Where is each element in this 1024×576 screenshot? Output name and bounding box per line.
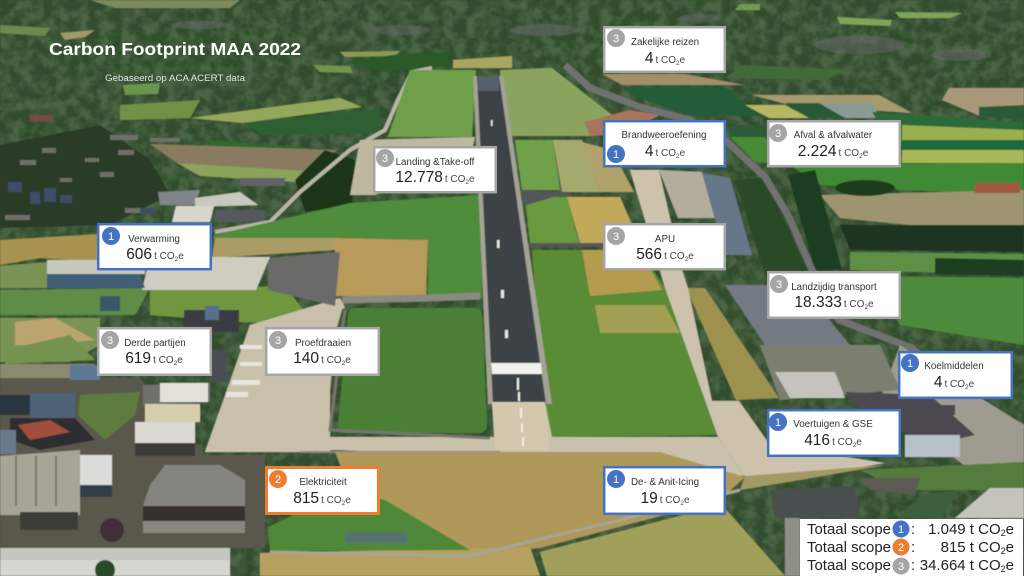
distant fields and houses north-west [0,0,512,208]
card: Zakelijke reizen [604,27,725,72]
value: 4t CO [934,374,965,391]
total scope 2 [807,538,1014,556]
scope 3 badge: 3 [107,335,113,347]
total scope 3: e [1006,557,1014,574]
total scope 1: : [911,521,915,538]
card: Landing & Take-off [374,147,496,192]
value: e [680,55,686,66]
label: Afval & afvalwater [794,130,873,141]
subtitle: Gebaseerd op ACA ACERT data [105,73,245,83]
label: Landing &Take-off [396,157,475,168]
scope 3 badge: 3 [275,335,281,347]
value: 2 [965,384,969,391]
total scope 3: 3 [898,561,904,573]
card: Verwarming [98,224,211,269]
total scope 2: 2 [898,542,904,554]
total scope 2: Totaal scope [807,539,891,556]
label: Verwarming [128,234,180,245]
card: De- & Anit-Icing [604,467,725,514]
value: 2 [676,153,680,160]
value: 619t CO [125,350,174,367]
value: e [177,355,183,366]
value: 2 [864,304,868,311]
value: 2 [853,442,857,449]
card: Koelmiddelen [899,352,1012,398]
total scope 3: 2 [1001,564,1006,574]
value: 12.778t CO [395,169,465,186]
scope 1 badge: 1 [613,474,619,486]
card: Derde partijen [98,328,211,375]
village left [0,115,180,228]
value: 416t CO [804,432,853,449]
value: 2 [342,360,346,367]
value: 19t CO [640,490,680,507]
value: 2 [680,500,684,507]
total scope 1 [807,520,1014,538]
value: 2 [676,60,680,67]
title: Carbon Footprint MAA 2022 [49,39,301,59]
card: Brandweeroefening [604,121,725,166]
value: 4t CO [645,143,676,160]
total scope 1: 2 [1001,528,1006,538]
total scope 2: e [1006,539,1014,556]
value: e [969,379,975,390]
total scope 1: 1 [898,524,904,536]
label: Zakelijke reizen [631,37,699,48]
label: Derde partijen [124,338,186,349]
total scope 2: : [911,539,915,556]
total scope 3: 34.664 t CO [920,557,1001,574]
value: 2 [342,500,346,507]
scope 1 badge: 1 [775,417,781,429]
card: Landzijdig transport [768,272,900,318]
value: e [680,148,686,159]
scope 1 badge: 1 [613,149,619,161]
value: 815t CO [293,490,342,507]
label: Brandweeroefening [622,130,706,141]
card: Proefdraaien [266,328,379,375]
value: e [863,148,869,159]
value: 140t CO [293,350,342,367]
total scope 2: 2 [1001,546,1006,556]
scope 2 badge: 2 [275,474,281,486]
value: e [345,355,351,366]
scope 3 badge: 3 [613,33,619,45]
bottom fields [260,452,885,576]
taxiways and aprons [142,170,885,478]
value: 606t CO [126,246,175,263]
scope 1 badge: 1 [108,231,114,243]
card: APU [604,224,725,269]
value: e [688,251,694,262]
value: e [345,495,351,506]
value: 2 [465,179,469,186]
total scope 1: 1.049 t CO [928,521,1001,538]
total scope 2: 815 t CO [941,539,1001,556]
value: e [469,174,475,185]
scope 3 badge: 3 [776,279,782,291]
label: De- & Anit-Icing [631,477,699,488]
airfield grass [0,68,779,437]
runway [473,76,552,450]
total scope 3 [807,557,1014,574]
label: Elektriciteit [299,477,347,488]
card: Elektriciteit [266,468,378,514]
label: Voertuigen & GSE [793,419,873,430]
card: Voertuigen & GSE [768,410,900,456]
value: 18.333t CO [794,294,864,311]
value: 566t CO [636,246,685,263]
card: Afval & afvalwater [768,121,900,166]
industrial area southwest [0,260,265,576]
total scope 3: Totaal scope [807,557,891,574]
value: 2.224t CO [798,143,859,160]
total scope 1: e [1006,521,1014,538]
industrial estate north [158,150,355,222]
totals panel [800,519,1023,576]
value: 2 [685,256,689,263]
value: 2 [175,256,179,263]
label: Landzijdig transport [791,282,877,293]
label: APU [655,234,675,245]
label: Koelmiddelen [924,361,984,372]
value: e [178,251,184,262]
value: e [856,437,862,448]
scope 3 badge: 3 [613,231,619,243]
value: e [868,299,874,310]
perimeter road [215,68,432,232]
scope 3 badge: 3 [382,153,388,165]
total scope 1: Totaal scope [807,521,891,538]
value: 2 [859,153,863,160]
value: 4t CO [645,50,676,67]
value: e [684,495,690,506]
scope 3 badge: 3 [775,128,781,140]
value: 2 [174,360,178,367]
label: Proefdraaien [295,338,351,349]
scope 1 badge: 1 [907,358,913,370]
total scope 3: : [911,557,915,574]
